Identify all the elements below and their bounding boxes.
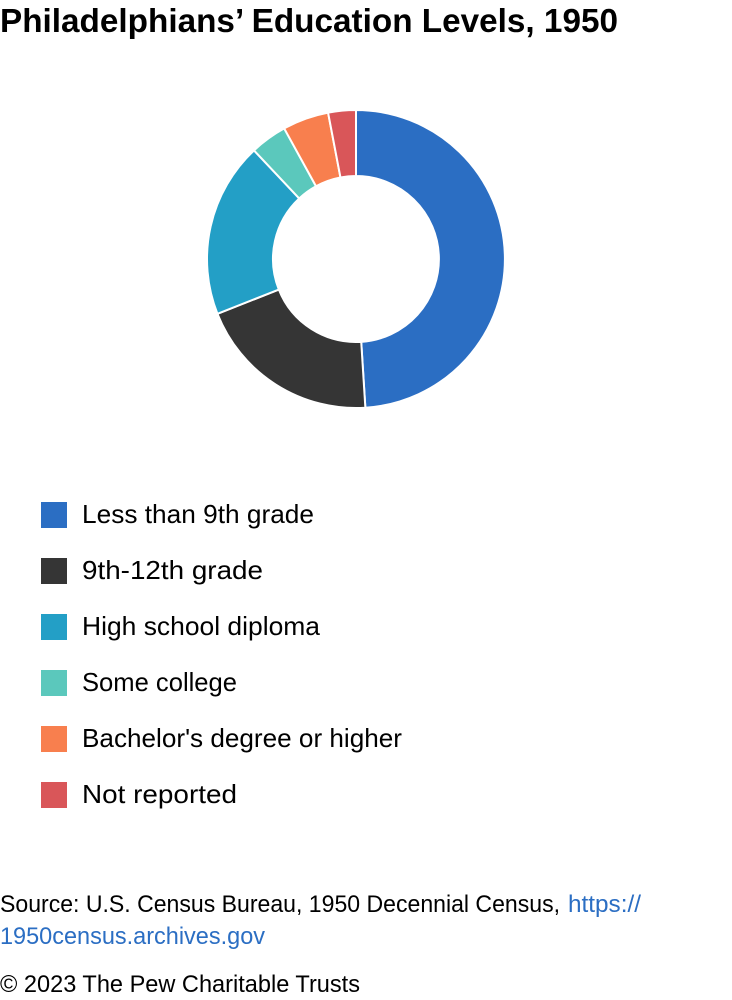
legend item: not reported: Not reported [82,779,237,809]
segment: bachelor's degree or higher [284,113,340,186]
legend item: high school diploma: High school diploma [82,611,321,641]
copyright: © 2023 The Pew Charitable Trusts [0,971,360,998]
segment: less than 9th grade [356,110,505,408]
legend item: 9th-12th grade: 9th-12th grade [82,555,263,585]
source note: 1950census.archives.gov [0,923,265,950]
legend item: some college: Some college [82,667,237,697]
source note [0,891,641,950]
segment: 9th-12th grade [217,290,365,408]
title: Philadelphians’ Education Levels, 1950 [0,2,618,39]
segment: not reported [328,110,356,177]
donut chart [207,110,505,408]
legend item: less than 9th grade: Less than 9th grade [82,499,314,529]
source note: https:// [568,891,641,918]
source note: Source: U.S. Census Bureau, 1950 Decennial Census, [0,891,560,918]
segment: some college [254,128,316,198]
legend [41,499,402,809]
segment: high school diploma [207,150,299,314]
legend item: bachelor's degree or higher: Bachelor's degree or higher [82,723,402,753]
